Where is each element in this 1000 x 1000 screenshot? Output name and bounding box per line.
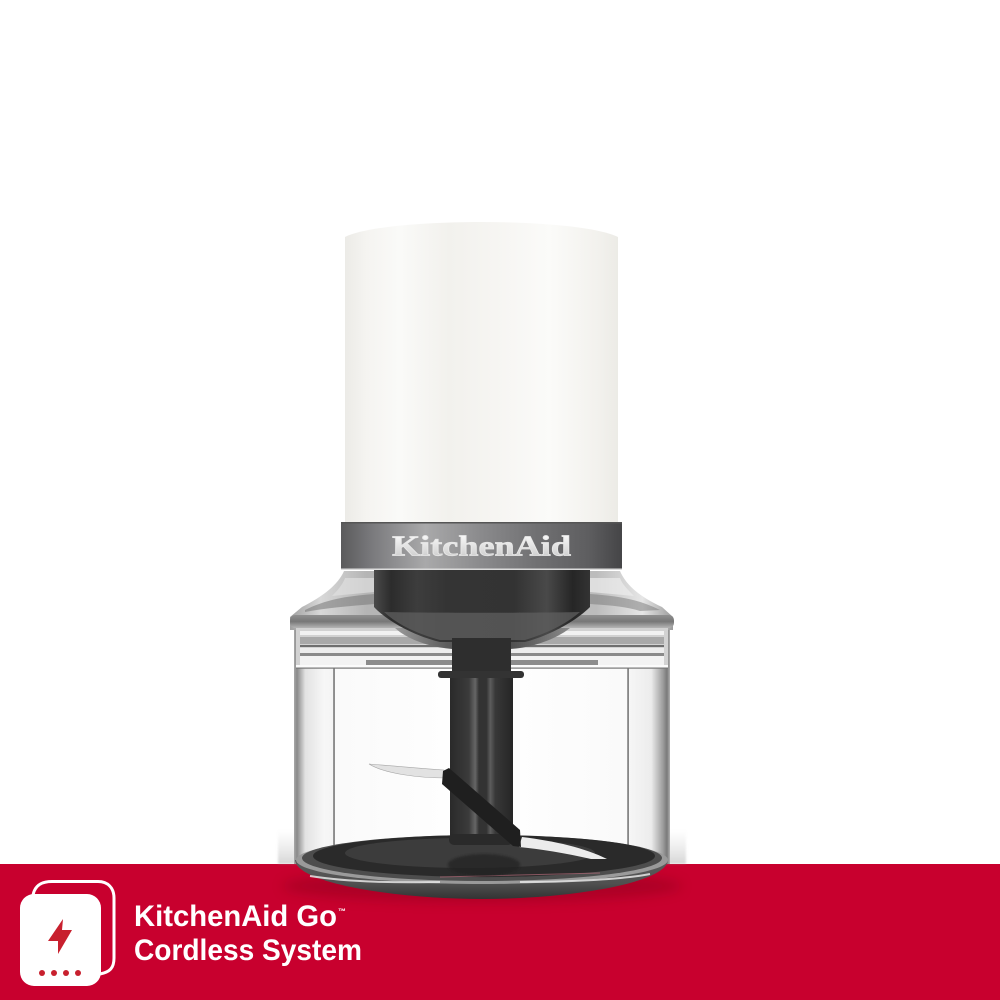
bowl wall <box>294 628 670 864</box>
metal collar <box>341 522 622 570</box>
blade arm <box>442 768 521 847</box>
charge dots <box>39 970 81 976</box>
footer label <box>134 900 362 967</box>
logo: KitchenAid <box>392 532 572 562</box>
contact shadow <box>278 830 686 902</box>
lid shoulder <box>290 571 673 630</box>
footer label: ™ <box>338 907 346 916</box>
lower blade <box>519 837 607 859</box>
upper blade <box>369 764 446 778</box>
shaft flange <box>438 671 524 678</box>
footer label: KitchenAid Go <box>134 900 337 933</box>
front battery <box>20 894 101 986</box>
icon: cordless battery <box>20 882 114 986</box>
upper shaft <box>452 638 511 674</box>
lid rim <box>290 615 674 669</box>
dark inner cone <box>374 570 590 649</box>
central shaft <box>450 678 513 840</box>
footer label: Cordless System <box>134 934 362 967</box>
back outline <box>33 882 114 974</box>
chopper product illustration <box>278 222 686 902</box>
footer band <box>0 864 1000 1000</box>
motor body <box>345 222 618 523</box>
blade base plate <box>295 835 668 899</box>
shaft foot <box>448 834 520 876</box>
lightning bolt <box>48 919 72 954</box>
